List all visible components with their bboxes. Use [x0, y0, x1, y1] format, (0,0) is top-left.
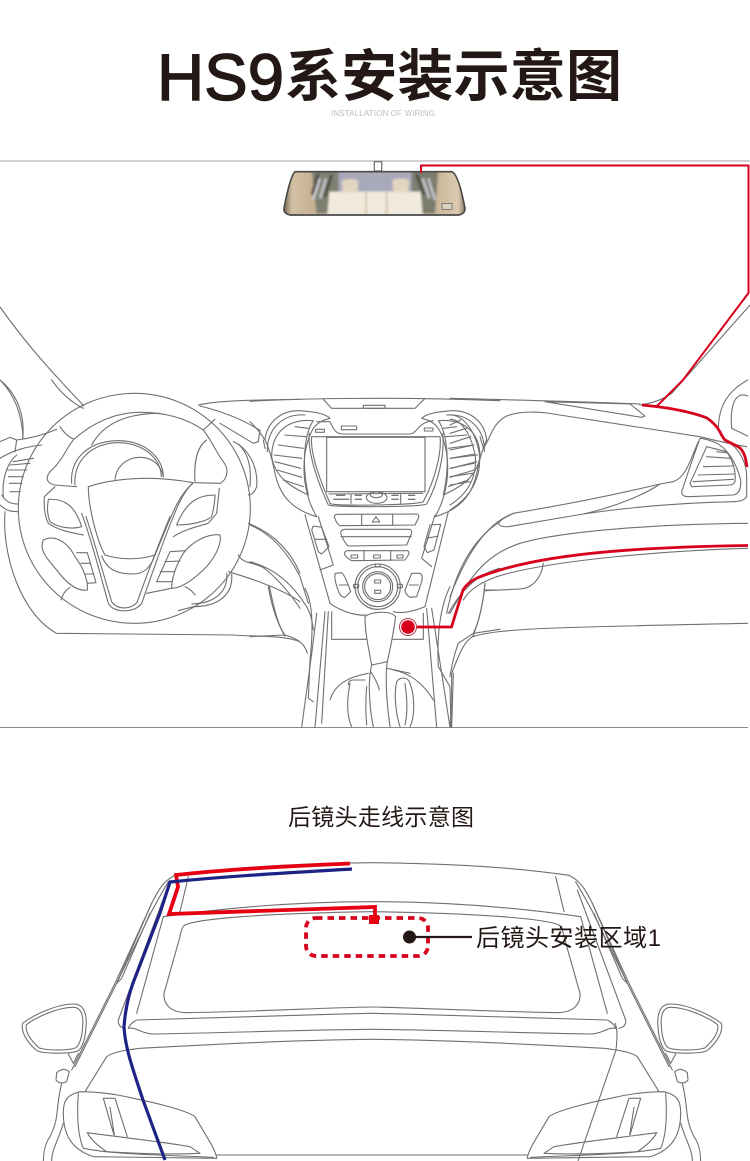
- right-side body seam: [578, 1023, 617, 1161]
- rearview mirror: [283, 162, 467, 215]
- center console: [250, 398, 500, 727]
- red wire: rear camera: [169, 864, 375, 920]
- blue wire: rear power: [124, 869, 352, 1160]
- right vent housing: [682, 438, 747, 502]
- red wire: windshield to dash: [421, 166, 748, 406]
- power socket dot: [400, 618, 416, 636]
- panel: dashboard wiring diagram: [0, 161, 750, 728]
- screen buttons: [329, 492, 423, 503]
- rear camera section heading: 后镜头走线示意图: [288, 804, 474, 830]
- panel: rear of car: [22, 863, 722, 1161]
- car left half: [22, 863, 372, 1161]
- windshield pillars: [0, 305, 750, 438]
- title: HS9: [157, 40, 284, 114]
- subtitle: INSTALLATION OF WIRING: [331, 109, 435, 118]
- right dash: [450, 380, 748, 727]
- steering wheel and left dash: [0, 380, 300, 642]
- left vent: [250, 411, 330, 517]
- title: 系安装示意图: [285, 45, 622, 108]
- title: [157, 40, 622, 114]
- gear shifter: [330, 612, 433, 727]
- right vent: [422, 411, 487, 517]
- screen frame: [317, 421, 433, 434]
- climate knob: [335, 564, 422, 609]
- red wire: power socket: [415, 546, 748, 627]
- car right half: [372, 863, 722, 1161]
- rear camera install area: [306, 918, 428, 956]
- console buttons: [305, 512, 448, 615]
- camera mount marker: [369, 915, 379, 924]
- callout: rear camera install area: 后镜头安装区域1: [476, 925, 661, 952]
- lower console panels: [250, 522, 500, 727]
- red wire: dash to pillar: [642, 405, 747, 467]
